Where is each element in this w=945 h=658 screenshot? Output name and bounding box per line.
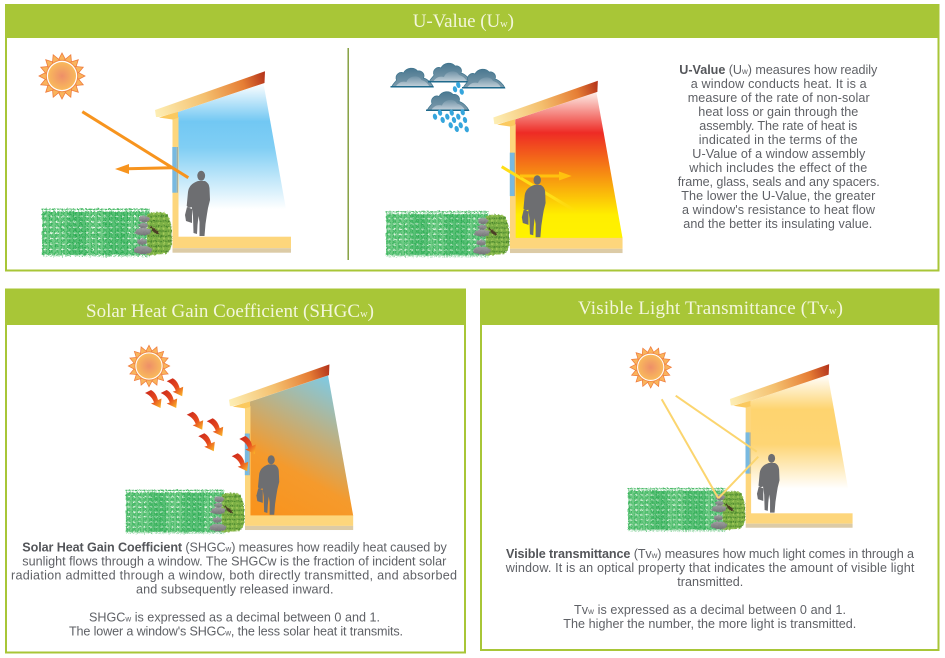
text block: U-Value description: U-Value (Uw) measures how readily <box>679 63 878 77</box>
heading bar: U-Value: U-Value (Uw) <box>413 11 514 32</box>
text block: U-Value description: measure of the rate of non-solar <box>688 91 870 105</box>
text block: U-Value description: a window conducts heat. It is a <box>691 77 867 91</box>
arrows: light rays <box>662 396 758 498</box>
heading bar: U-Value <box>5 4 940 38</box>
heading bar: SHGC: Solar Heat Gain Coefficient (SHGCw) <box>86 301 374 322</box>
arrows: solar heat rays <box>145 378 256 471</box>
illustration: house with visible light <box>628 347 853 532</box>
text block: SHGC description: and subsequently released inward. <box>136 582 334 596</box>
illustration: house with heated interior in cold rain <box>386 63 623 257</box>
text block: SHGC description: sunlight flows through a window. The SHGCw is the fraction of incident solar <box>22 554 446 568</box>
heading bar: SHGC <box>5 288 466 325</box>
panel: U-Value <box>5 4 940 270</box>
text block: SHGC description: SHGCw is expressed as a decimal between 0 and 1. <box>89 610 380 624</box>
text block: visible transmittance description: The higher the number, the more light is transmitted. <box>563 617 856 631</box>
heading bar: Visible Light Transmittance: Visible Light Transmittance (Tvw) <box>578 298 843 319</box>
arrow: reflected solar ray <box>82 112 188 178</box>
text block: visible transmittance description: Visible transmittance (Tvw) measures how much light comes in through a <box>506 547 914 561</box>
text block: visible transmittance description: window. It is an optical property that indicates the amount of visible light <box>505 561 915 575</box>
icon: sun <box>39 53 85 99</box>
text block: U-Value description: U-Value of a window assembly <box>692 147 866 161</box>
text block: U-Value description: indicated in the terms of the <box>699 133 858 147</box>
text block: U-Value description: frame, glass, seals and any spacers. <box>678 175 880 189</box>
text block: visible transmittance description: Tvw is expressed as a decimal between 0 and 1. <box>574 603 846 617</box>
text block: SHGC description: The lower a window's SHGCw, the less solar heat it transmits. <box>69 624 403 638</box>
arrow: heat flow through window <box>502 167 577 212</box>
text block: SHGC description: radiation admitted through a window, both directly transmitted, and absorbed <box>11 568 457 582</box>
text block: U-Value description: a window's resistance to heat flow <box>682 203 876 217</box>
text block: visible transmittance description: transmitted. <box>677 575 743 589</box>
icon: rain clouds <box>390 63 505 133</box>
icon: sun <box>128 345 170 387</box>
text block: U-Value description <box>678 63 880 231</box>
illustration: house losing heat in sun <box>39 53 291 257</box>
text block: U-Value description: which includes the effect of the <box>688 161 867 175</box>
text block: U-Value description: The lower the U-Value, the greater <box>681 189 875 203</box>
panel: Solar Heat Gain Coefficient <box>5 288 466 652</box>
heading bar: Visible Light Transmittance <box>480 288 940 325</box>
text block: U-Value description: heat loss or gain through the <box>698 105 858 119</box>
panel: Visible Light Transmittance <box>480 288 940 650</box>
text block: SHGC description: Solar Heat Gain Coefficient (SHGCw) measures how readily heat caused by <box>22 540 448 554</box>
text block: U-Value description: assembly. The rate of heat is <box>699 119 857 133</box>
text block: SHGC description <box>11 540 457 638</box>
text block: visible transmittance description <box>505 547 915 631</box>
icon: sun <box>630 347 671 388</box>
text block: U-Value description: and the better its insulating value. <box>683 217 872 231</box>
illustration: house with solar heat gain <box>126 345 353 534</box>
